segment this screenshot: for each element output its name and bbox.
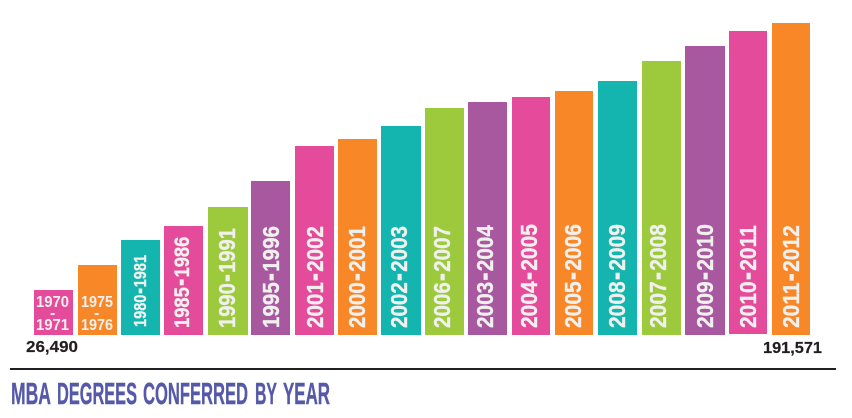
bar: 1970-1971 bbox=[34, 290, 73, 335]
bar: 2004-2005 bbox=[512, 97, 550, 335]
bar: 1990-1991: - bbox=[212, 275, 239, 281]
bar: 1995-1996 bbox=[251, 181, 290, 335]
bar: 1975-1976: 1976 bbox=[81, 317, 113, 334]
bar: 2001-2002: 2001 bbox=[302, 282, 328, 328]
bar: 1970-1971: 1971 bbox=[36, 317, 69, 334]
bar: 1985-1986: 1986 bbox=[171, 237, 194, 278]
bar: 2005-2006: - bbox=[559, 273, 585, 280]
bar: 2004-2005: 2004 bbox=[516, 281, 542, 328]
title bbox=[11, 376, 330, 411]
bar: 2005-2006 bbox=[555, 91, 593, 335]
bar: 1995-1996: - bbox=[256, 274, 283, 280]
bar chart bbox=[34, 23, 810, 335]
bar: 2011-2012: 2011 bbox=[778, 283, 804, 328]
bar: 1975-1976: 1975 bbox=[81, 294, 113, 311]
bar: 1975-1976 bbox=[78, 265, 117, 335]
bar: 2001-2002: - bbox=[300, 274, 327, 280]
bar: 1980-1981: - bbox=[129, 289, 149, 293]
bar: 2007-2008: - bbox=[644, 273, 670, 280]
bar: 1970-1971: - bbox=[50, 305, 55, 322]
bar: 2004-2005: - bbox=[515, 273, 541, 280]
bar: 2008-2009: 2008 bbox=[604, 281, 630, 328]
bar: 2007-2008: 2008 bbox=[645, 224, 671, 271]
bar: 2009-2010: 2009 bbox=[692, 281, 718, 328]
bar: 2003-2004 bbox=[468, 102, 507, 335]
title: CONFERRED bbox=[143, 376, 248, 411]
bar: 2010-2011: 2011 bbox=[735, 225, 761, 271]
bar: 2009-2010: - bbox=[691, 273, 717, 280]
bar: 1995-1996: 1996 bbox=[258, 226, 284, 272]
bar: 2007-2008 bbox=[642, 61, 681, 335]
bar: 2002-2003 bbox=[381, 126, 421, 335]
bar: 1990-1991 bbox=[208, 207, 248, 335]
bar: 2005-2006: 2005 bbox=[560, 281, 586, 328]
bar: 1980-1981: 1981 bbox=[131, 255, 150, 287]
bar: 2005-2006: 2006 bbox=[560, 224, 586, 271]
bar: 2003-2004: - bbox=[471, 273, 497, 280]
bar: 2006-2007: - bbox=[427, 274, 454, 280]
bar: 2000-2001 bbox=[338, 139, 377, 335]
bar: 2008-2009: 2009 bbox=[604, 224, 630, 271]
bar: 2002-2003: - bbox=[384, 274, 411, 280]
bar: 1985-1986: 1985 bbox=[171, 287, 194, 328]
bar: 1990-1991: 1991 bbox=[214, 228, 240, 273]
title: BY bbox=[255, 376, 277, 411]
bar: 2006-2007: 2006 bbox=[429, 282, 455, 328]
bar: 2007-2008: 2007 bbox=[645, 281, 671, 328]
bar: 1985-1986: - bbox=[170, 279, 193, 285]
bar: 2008-2009: - bbox=[603, 273, 629, 280]
bar: 2000-2001: - bbox=[342, 274, 369, 280]
bar: 2001-2002 bbox=[295, 146, 334, 335]
bar: 2006-2007 bbox=[425, 108, 464, 335]
bar: 2006-2007: 2007 bbox=[429, 226, 455, 272]
bar: 2010-2011: 2010 bbox=[735, 281, 761, 328]
bar: 2001-2002: 2002 bbox=[302, 226, 328, 272]
bar: 2009-2010 bbox=[685, 46, 725, 335]
end value: 191,571 bbox=[763, 340, 822, 357]
bar: 1995-1996: 1995 bbox=[258, 282, 284, 328]
bar: 2008-2009 bbox=[598, 81, 637, 335]
bar: 1980-1981: 1980 bbox=[131, 295, 150, 327]
start value: 26,490 bbox=[26, 339, 78, 356]
title: YEAR bbox=[283, 376, 330, 411]
bar: 1975-1976: - bbox=[94, 305, 99, 322]
bar: 2009-2010: 2010 bbox=[692, 224, 718, 271]
bar: 2004-2005: 2005 bbox=[516, 224, 542, 271]
bar: 2000-2001: 2000 bbox=[344, 282, 370, 328]
bar: 1985-1986 bbox=[164, 226, 203, 335]
title: DEGREES bbox=[57, 376, 137, 411]
bar: 1990-1991: 1990 bbox=[214, 283, 240, 328]
bar: 2010-2011: - bbox=[734, 273, 760, 280]
bar: 2002-2003: 2003 bbox=[386, 226, 412, 272]
bar: 2000-2001: 2001 bbox=[344, 226, 370, 272]
bar: 2011-2012: - bbox=[777, 274, 803, 281]
bar: 2011-2012: 2012 bbox=[778, 225, 804, 272]
bar: 2010-2011 bbox=[729, 31, 767, 334]
title: MBA bbox=[11, 376, 51, 411]
bar: 2011-2012 bbox=[772, 23, 810, 335]
bar: 1980-1981 bbox=[121, 240, 160, 335]
bar: 2003-2004: 2004 bbox=[472, 224, 498, 271]
bar: 2003-2004: 2003 bbox=[472, 282, 498, 328]
bar: 1970-1971: 1970 bbox=[36, 294, 69, 311]
bar: 2002-2003: 2002 bbox=[386, 282, 412, 328]
